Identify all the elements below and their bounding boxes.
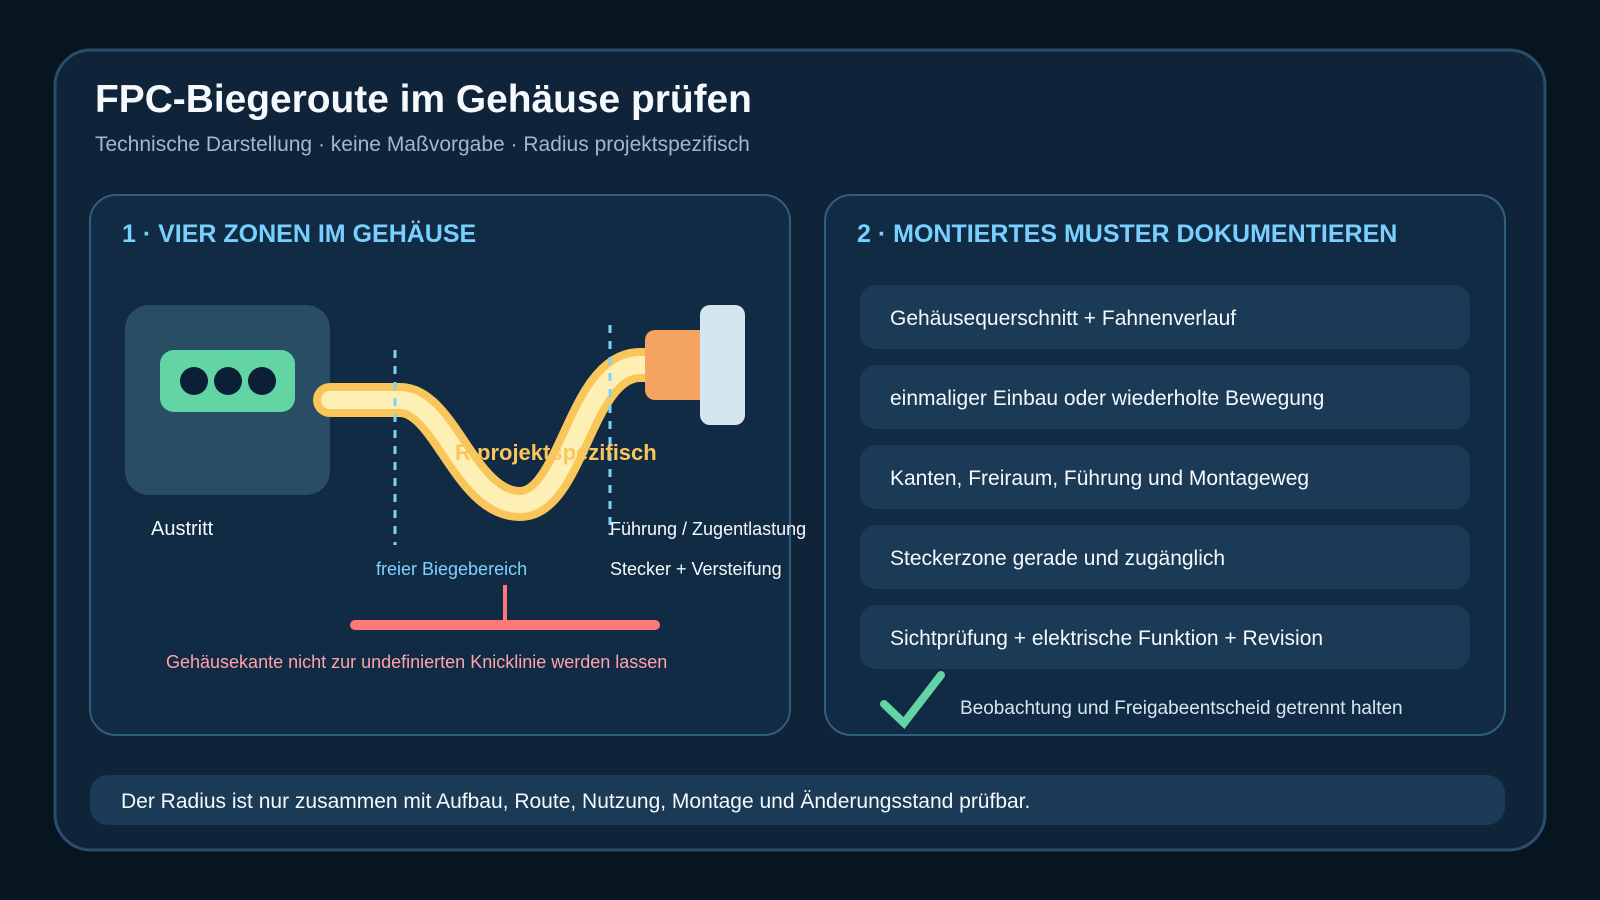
icon: check mark [884,675,941,723]
panel: vier Zonen im Gehäuse [90,195,806,735]
row 4 [860,525,1470,589]
subtitle: Technische Darstellung · keine Maßvorgabe · Radius projektspezifisch [95,133,750,156]
FPC cable route [330,365,660,504]
label: freier Biegebereich: freier Biegebereich [376,559,527,579]
label: Führung: Führung / Zugentlastung [610,519,806,539]
housing exit block [125,305,330,495]
orange stiffener [645,330,720,400]
row 5 [860,605,1470,669]
panel heading 2: 2 · MONTIERTES MUSTER DOKUMENTIEREN [857,220,1397,248]
row 4: Steckerzone gerade und zugänglich [890,547,1225,570]
zone boundary: guide [608,325,612,535]
footer bar: Der Radius ist nur zusammen mit Aufbau, Route, Nutzung, Montage und Änderungsstand prüfbar. [121,790,1030,813]
panel heading 1: 1 · VIER ZONEN IM GEHÄUSE [122,220,476,248]
row 3 [860,445,1470,509]
row 2 [860,365,1470,429]
panel: montiertes Muster dokumentieren [825,195,1505,735]
label: Stecker: Stecker + Versteifung [610,559,782,579]
check note: Beobachtung und Freigabeentscheid getrennt halten [960,698,1403,719]
row 2: einmaliger Einbau oder wiederholte Bewegung [890,387,1324,410]
row 3: Kanten, Freiraum, Führung und Montageweg [890,467,1309,490]
footer bar [90,775,1505,825]
radius label: R projektspezifisch [455,440,657,465]
icon: green connector with three holes [160,350,295,412]
warning text: Gehäusekante nicht zur undefinierten Knicklinie werden lassen [166,652,667,672]
label: Austritt: Austritt [151,518,214,540]
title: FPC-Biegeroute im Gehäuse prüfen [95,78,752,121]
zone boundary: free bend start [394,350,396,545]
row 5: Sichtprüfung + elektrische Funktion + Revision [890,627,1323,650]
connector plate [700,305,745,425]
housing edge marker [350,585,660,630]
row 1: Gehäusequerschnitt + Fahnenverlauf [890,307,1236,330]
row 1 [860,285,1470,349]
